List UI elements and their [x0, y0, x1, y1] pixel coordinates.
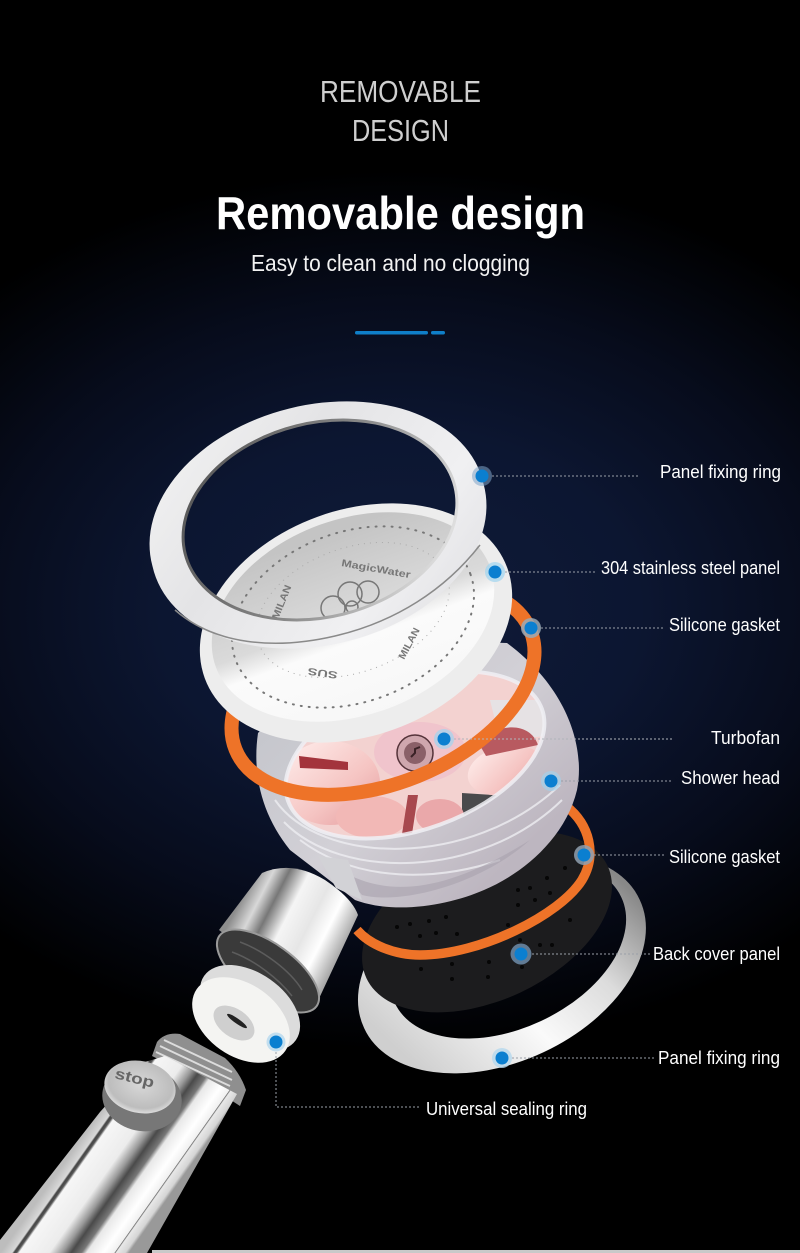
accent bar	[355, 331, 445, 334]
top panel fixing ring	[150, 392, 486, 649]
transparent shower head body	[256, 639, 579, 907]
english overline title	[320, 74, 481, 148]
chrome handle with stop button	[0, 1034, 246, 1253]
callout: shower head	[541, 767, 780, 791]
callout: stainless steel panel: 304 stainless steel panel	[601, 557, 780, 578]
english overline title: REMOVABLE	[320, 74, 481, 109]
turbofan cavity	[288, 674, 542, 836]
callout: shower head: Shower head	[681, 767, 780, 788]
callout: turbofan: Turbofan	[711, 727, 780, 748]
304 stainless steel panel	[166, 462, 546, 784]
callout: turbofan	[434, 727, 780, 749]
panel engraving	[271, 558, 423, 680]
rear silicone gasket	[357, 806, 590, 955]
subtitle: Easy to clean and no clogging	[251, 250, 530, 276]
callout: universal sealing ring: Universal sealing ring	[426, 1098, 587, 1119]
chrome handle with stop button: stop	[113, 1065, 156, 1092]
stem joining the connector	[318, 856, 362, 900]
main title: Removable design	[216, 187, 585, 239]
heading block	[216, 74, 585, 334]
callout: stainless steel panel	[485, 557, 780, 582]
callout: panel fixing ring top: Panel fixing ring	[660, 461, 781, 482]
bottom edge strip	[152, 1250, 800, 1253]
rear panel fixing ring	[358, 855, 646, 1073]
panel engraving: SUS	[307, 665, 338, 680]
panel engraving: MagicWater	[340, 558, 411, 581]
callout: panel fixing ring bottom: Panel fixing ring	[658, 1047, 780, 1068]
english overline title: DESIGN	[352, 113, 449, 148]
panel engraving: MILAN	[271, 584, 294, 621]
callout: back cover panel	[510, 943, 780, 964]
back cover panel	[333, 795, 641, 1049]
callout: universal sealing ring	[266, 1032, 587, 1119]
callout: silicone gasket lower	[574, 845, 780, 867]
stop button	[96, 1057, 188, 1139]
thread	[152, 1034, 246, 1106]
callout: silicone gasket lower: Silicone gasket	[669, 846, 780, 867]
callout: silicone gasket upper	[521, 614, 780, 638]
panel engraving: MILAN	[397, 626, 423, 661]
upper silicone gasket	[201, 544, 565, 836]
handle barrel	[0, 1056, 237, 1253]
callout: silicone gasket upper: Silicone gasket	[669, 614, 780, 635]
callout: panel fixing ring bottom	[492, 1047, 780, 1068]
universal sealing ring	[176, 947, 316, 1080]
chrome connector	[204, 868, 358, 1028]
flower emblem	[321, 581, 379, 620]
callout: panel fixing ring top	[472, 461, 781, 486]
callout: back cover panel: Back cover panel	[653, 943, 780, 964]
exploded product view	[0, 392, 646, 1253]
